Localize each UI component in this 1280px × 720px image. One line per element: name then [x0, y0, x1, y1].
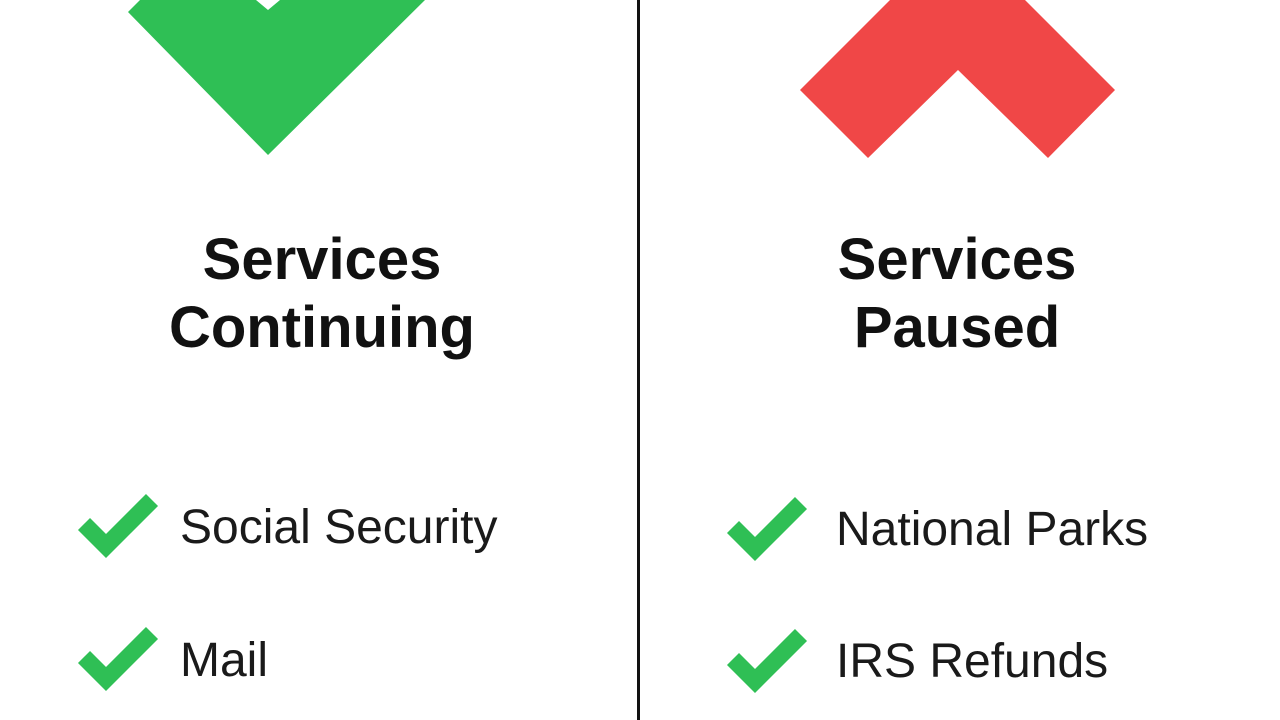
- title: Services Continuing: Continuing: [169, 295, 475, 360]
- title: Services Paused: Paused: [854, 295, 1060, 360]
- list item: National Parks: National Parks: [836, 503, 1148, 556]
- list item: Mail: Mail: [180, 634, 268, 687]
- icon: check: [727, 497, 807, 561]
- list item: Social Security: [78, 494, 498, 558]
- icon: big red chevron: [800, 0, 1115, 158]
- icon: big green check: [128, 0, 425, 155]
- icon: check: [78, 494, 158, 558]
- divider line: [637, 0, 640, 720]
- icon: check: [78, 627, 158, 691]
- list item: National Parks: [727, 497, 1148, 561]
- list item: Social Security: Social Security: [180, 501, 497, 554]
- title: Services Paused: [838, 227, 1076, 360]
- title: Services Continuing: Services: [203, 227, 441, 292]
- list item: IRS Refunds: IRS Refunds: [836, 635, 1108, 688]
- title: Services Paused: Services: [838, 227, 1076, 292]
- icon: check: [727, 629, 807, 693]
- title: Services Continuing: [169, 227, 475, 360]
- list item: IRS Refunds: [727, 629, 1108, 693]
- list item: Mail: [78, 627, 268, 691]
